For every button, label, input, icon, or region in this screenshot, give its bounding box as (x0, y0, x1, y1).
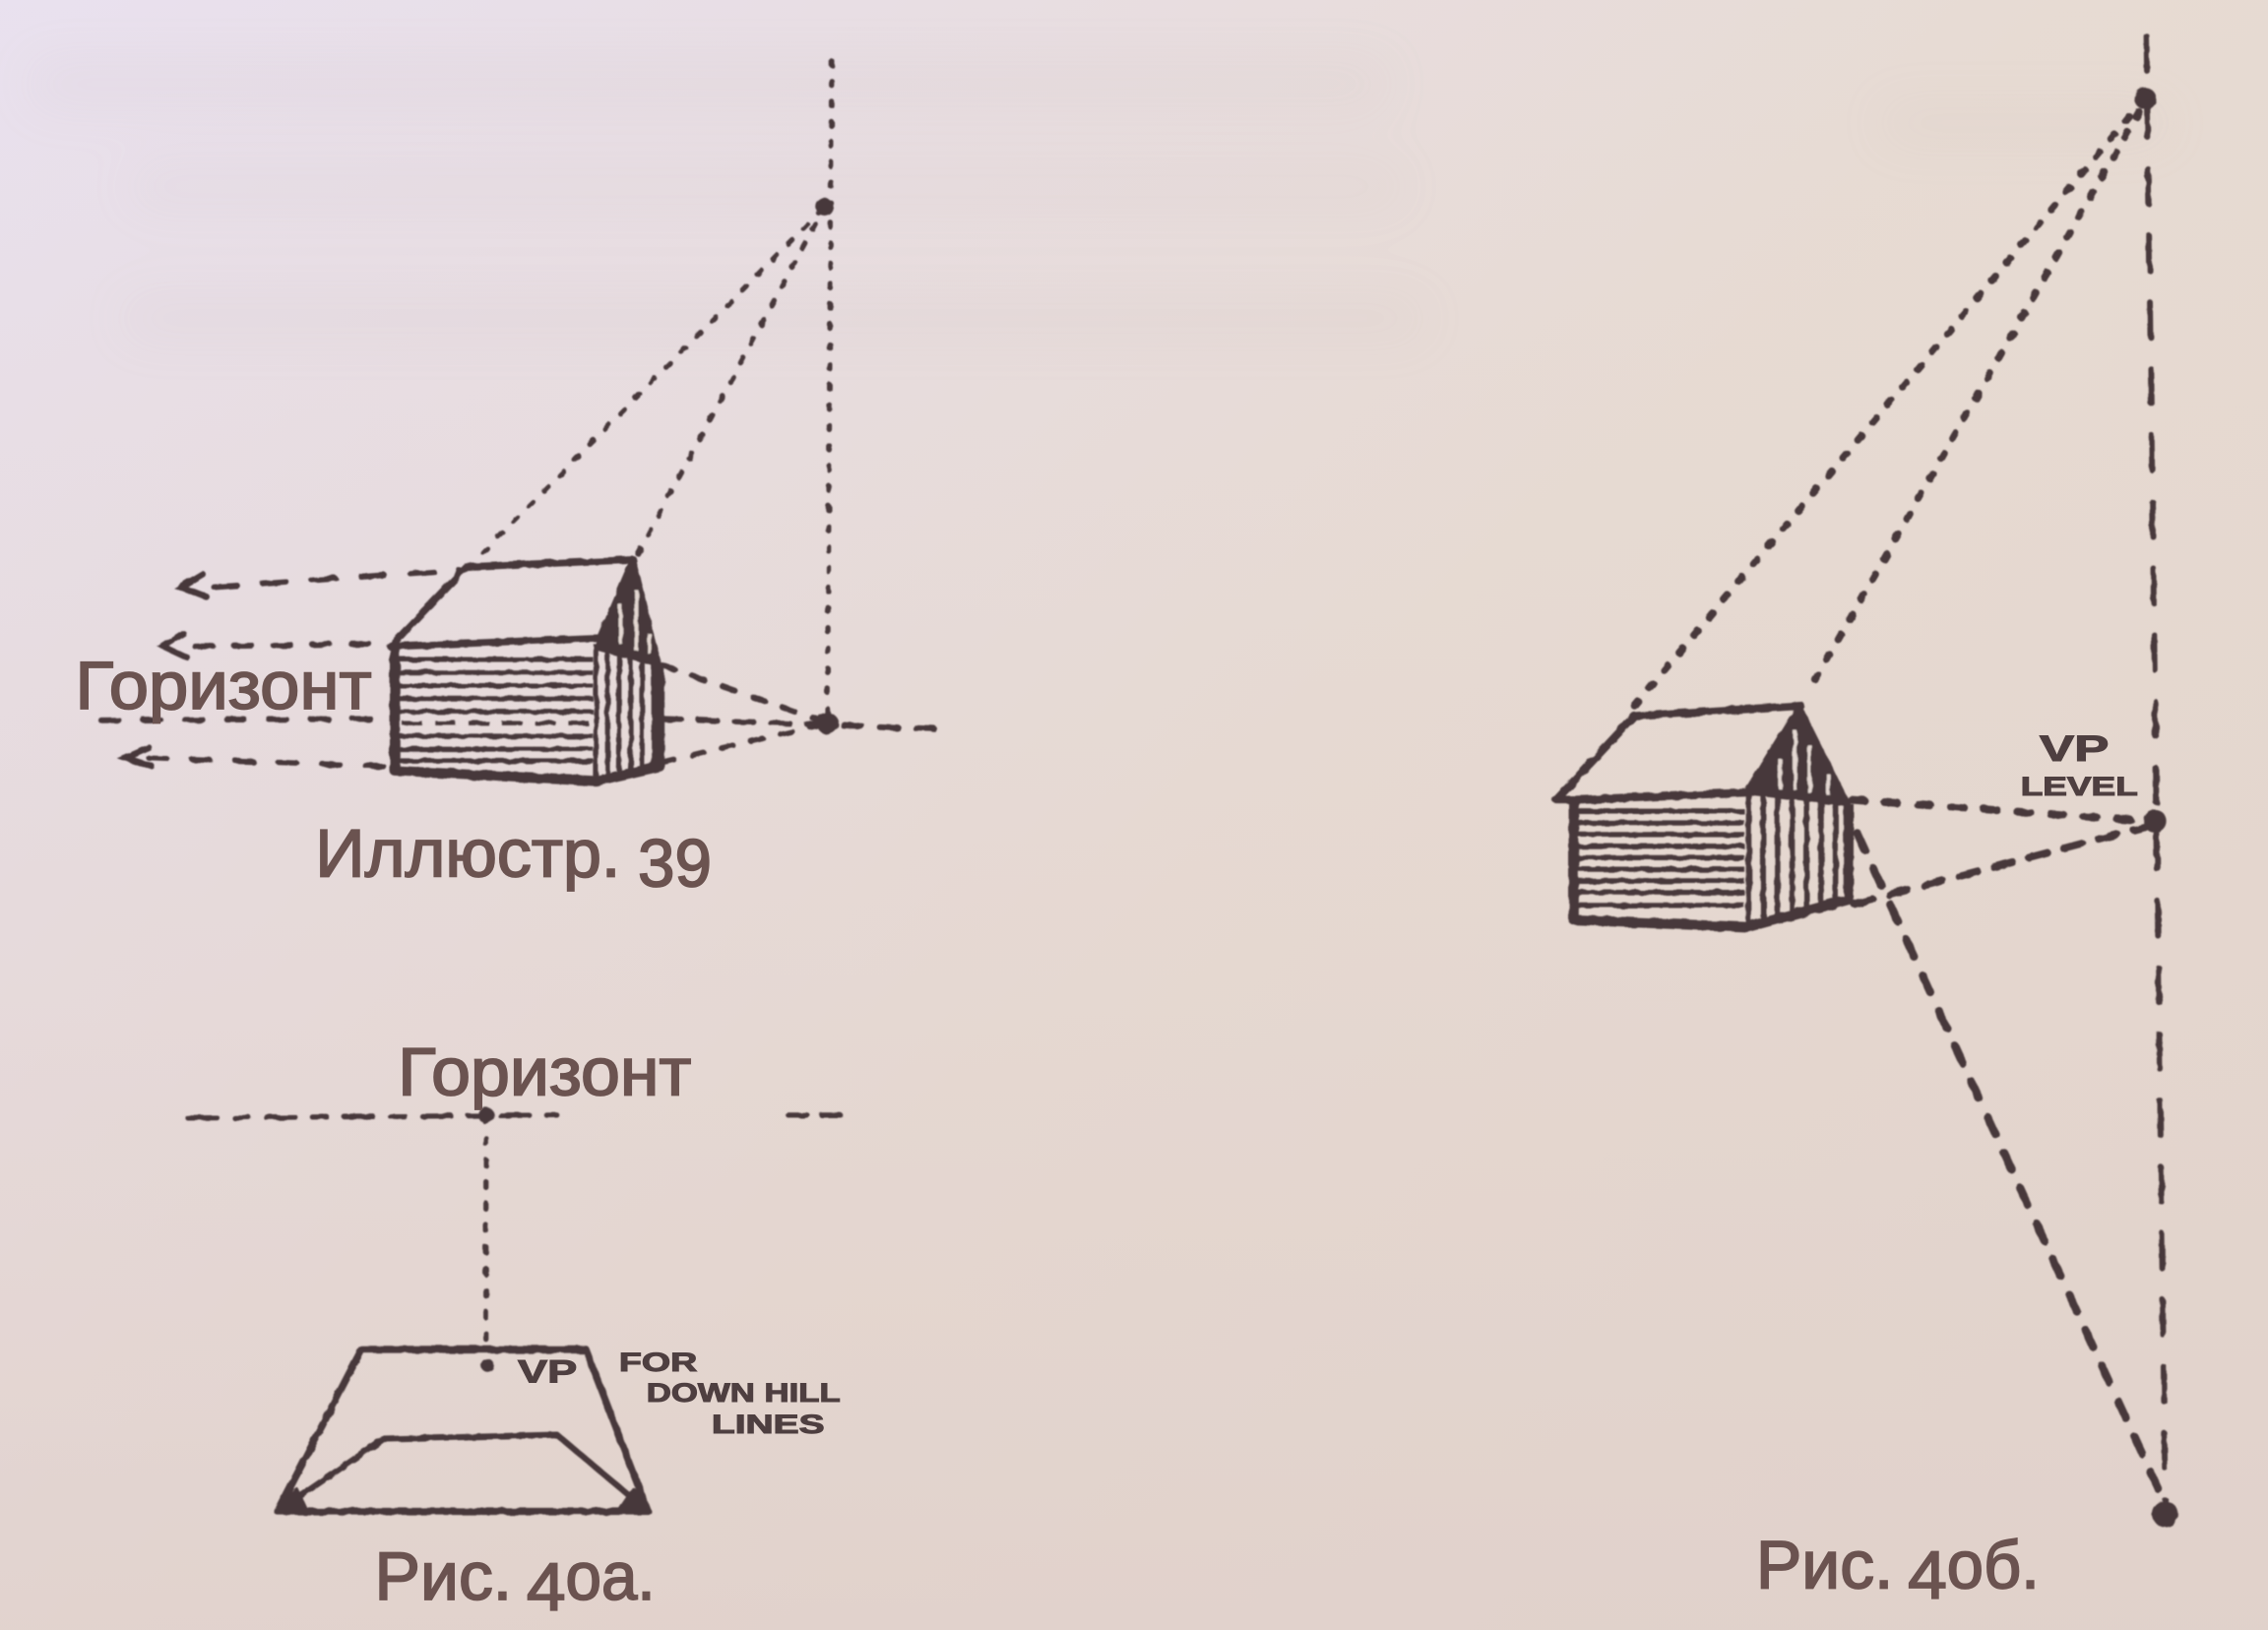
caption: figure 40b: 4 (1908, 1536, 1947, 1613)
lower vanishing point (2152, 1501, 2178, 1528)
horizontal siding (397, 659, 593, 761)
label: horizon, figure 40a: Горизонт (398, 1033, 691, 1109)
label: for down hill lines: FOR (619, 1348, 697, 1377)
icon: house with horizontal and vertical siding (391, 560, 662, 781)
label: for down hill lines (619, 1348, 841, 1439)
caption: illustration 39: 39 (638, 825, 712, 902)
road trapezoid (278, 1349, 648, 1512)
gable slits (1781, 730, 1828, 795)
figure: illustration 39, house with vanishing points (101, 61, 940, 781)
front wall outline (395, 647, 660, 781)
horizon line (188, 1115, 847, 1347)
vertical siding (1748, 792, 1849, 925)
roof (391, 560, 634, 647)
vertical siding (596, 644, 662, 781)
point on horizon (478, 1107, 494, 1123)
gable slits (620, 591, 650, 654)
caption: illustration 39 (315, 814, 712, 902)
gable end (1747, 709, 1849, 804)
label: horizon, illustration 39: Горизонт (75, 647, 372, 723)
upper vanishing point (816, 198, 833, 216)
label: for down hill lines: LINES (712, 1410, 825, 1439)
label: VP: VP (518, 1354, 577, 1390)
figure 40b: house with three vanishing points (1556, 36, 2178, 1528)
caption: figure 40b: Рис. (1756, 1526, 1893, 1602)
caption: illustration 39: Иллюстр. (315, 814, 620, 891)
caption: figure 40a: Рис. (375, 1537, 512, 1614)
caption: figure 40a: 4 (527, 1547, 566, 1624)
caption: figure 40b (1756, 1526, 2040, 1613)
icon: house with siding (1556, 706, 1849, 927)
wall outline (1574, 800, 1849, 927)
vanishing lines to upper point (483, 61, 940, 762)
caption: figure 40a (375, 1537, 656, 1624)
VP dot (481, 1358, 494, 1372)
upper vanishing point (2134, 88, 2156, 109)
roof (1556, 706, 1800, 800)
label: for down hill lines: DOWN HILL (647, 1378, 841, 1408)
left parallel arrows (101, 570, 460, 767)
label: VP level (2021, 728, 2138, 801)
horizon vanishing point (816, 713, 839, 734)
figure 40a: downhill road (188, 1107, 847, 1512)
horizontal siding (1577, 811, 1744, 906)
middle vanishing point (2144, 810, 2167, 833)
label: VP level: VP (2040, 728, 2109, 769)
caption: figure 40b: об. (1947, 1526, 2040, 1602)
dotted vertical (484, 1116, 488, 1347)
gable end (596, 560, 660, 665)
label: VP level: LEVEL (2021, 772, 2138, 801)
vanishing lines (1634, 36, 2166, 1504)
caption: figure 40a: оа. (566, 1537, 656, 1614)
